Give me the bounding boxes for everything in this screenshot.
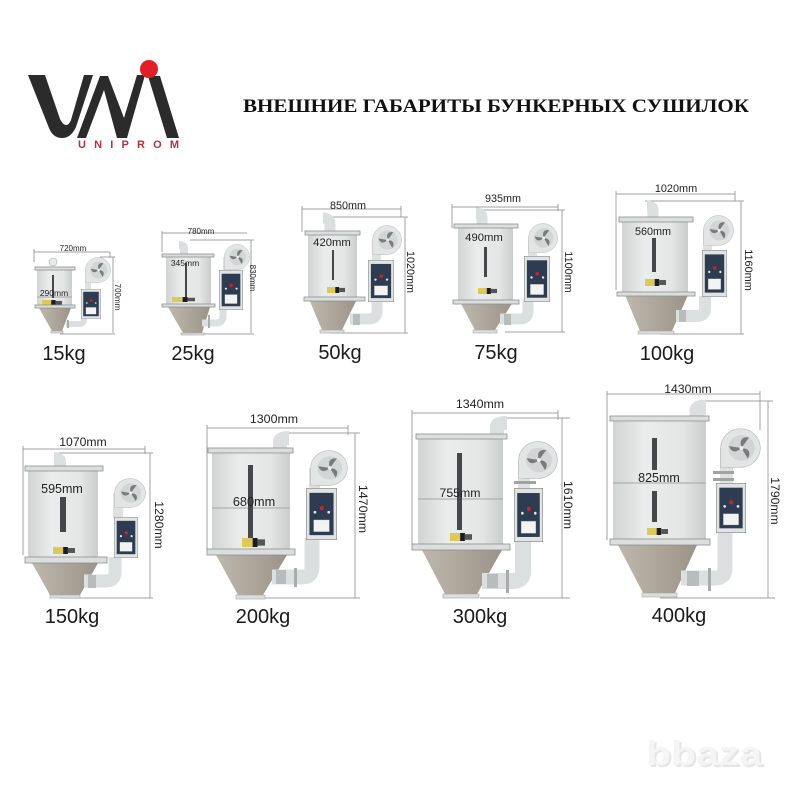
title: ВНЕШНИЕ ГАБАРИТЫ БУНКЕРНЫХ СУШИЛОК [243, 97, 750, 117]
unit: 200kg: 680mm [233, 495, 275, 509]
unit: 75kg: 935mm [485, 193, 521, 205]
unit: 150kg: 1070mm [59, 435, 107, 449]
unit: 100kg [616, 183, 754, 365]
unit: 400kg: 1790mm [768, 477, 782, 525]
unit: 300kg: 755mm [439, 486, 481, 500]
unit: 300kg [412, 397, 575, 628]
unit: 50kg: 850mm [330, 200, 366, 212]
unit: 100kg: 560mm [635, 226, 671, 238]
unit: 25kg [162, 227, 257, 365]
unit: 150kg [23, 435, 166, 628]
unit: 15kg: 700mm [113, 284, 122, 311]
unit: 50kg: 1020mm [404, 251, 416, 293]
watermark: bbaza [646, 735, 763, 773]
unit: 75kg [452, 193, 574, 364]
unit: 200kg: 200kg [236, 606, 290, 628]
unit: 50kg [302, 200, 416, 364]
unit: 150kg: 150kg [45, 606, 99, 628]
unit: 150kg: 595mm [41, 482, 83, 496]
unit: 50kg: 420mm [313, 237, 351, 249]
unit: 200kg: 1300mm [250, 412, 298, 426]
unit: 75kg: 490mm [465, 232, 503, 244]
unit: 100kg: 1160mm [742, 249, 754, 291]
unit: 300kg: 300kg [453, 606, 507, 628]
unit: 400kg [607, 382, 782, 627]
unit: 75kg: 75kg [474, 342, 518, 364]
unit: 15kg [34, 244, 122, 365]
logo: Uniprom: UNIPROM [78, 139, 179, 151]
unit: 400kg: 825mm [638, 471, 680, 485]
unit: 400kg: 400kg [652, 605, 706, 627]
unit: 300kg: 1610mm [561, 481, 575, 529]
unit: 15kg: 720mm [60, 244, 87, 253]
unit: 25kg: 25kg [171, 343, 215, 365]
watermark: bbaza [648, 737, 765, 775]
unit: 75kg: 1100mm [562, 251, 574, 293]
unit: 100kg: 100kg [640, 343, 694, 365]
unit: 25kg: 345mm [171, 258, 199, 268]
unit: 50kg: 50kg [318, 342, 362, 364]
unit: 100kg: 1020mm [655, 183, 697, 195]
unit: 15kg: 15kg [42, 343, 86, 365]
unit: 200kg: 1470mm [356, 485, 370, 533]
unit: 150kg: 1280mm [152, 501, 166, 549]
logo: Uniprom [28, 60, 179, 151]
unit: 15kg: 290mm [40, 288, 68, 298]
unit: 25kg: 830mm [248, 265, 257, 292]
unit: 300kg: 1340mm [456, 397, 504, 411]
unit: 25kg: 780mm [188, 227, 215, 236]
unit: 400kg: 1430mm [664, 382, 712, 396]
unit: 200kg [207, 412, 370, 628]
